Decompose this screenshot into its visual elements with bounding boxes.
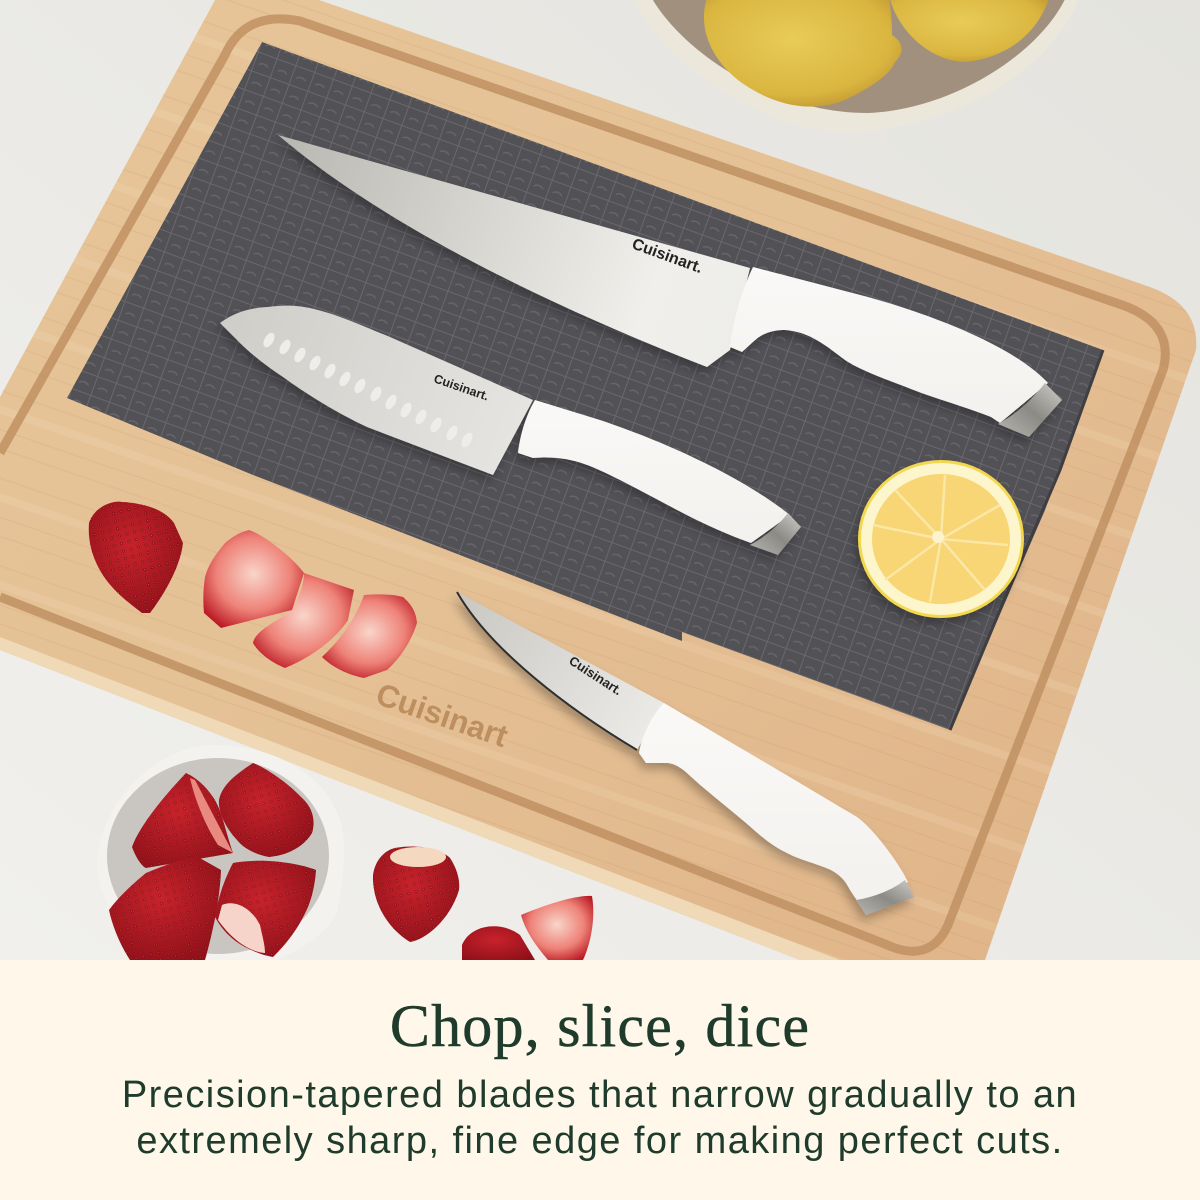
body text: extremely sharp, fine edge for making perfect cuts. <box>136 1120 1064 1162</box>
heading: Chop, slice, dice <box>390 993 810 1059</box>
whole halved berry <box>89 502 183 613</box>
towel <box>67 42 1103 730</box>
countertop <box>0 0 1200 960</box>
ramekin of strawberries <box>97 745 344 960</box>
photo: knives on cutting board <box>0 0 1196 960</box>
body text: Precision-tapered blades that narrow gradually to an <box>122 1074 1078 1116</box>
engraved logo: Cuisinart <box>372 676 513 754</box>
strawberry slices <box>89 502 417 678</box>
bowl of lemons <box>631 0 1080 132</box>
santoku knife <box>220 306 801 555</box>
loose strawberries <box>373 846 593 960</box>
brand: Cuisinart. <box>432 372 491 403</box>
dimples <box>261 331 475 449</box>
caption band <box>0 960 1200 1200</box>
brand: Cuisinart. <box>630 236 705 277</box>
lemon slice <box>858 460 1024 618</box>
brand: Cuisinart. <box>566 653 625 698</box>
chef knife <box>278 135 1062 437</box>
paring knife <box>457 592 914 915</box>
cutting board <box>0 0 1196 960</box>
body text <box>122 1074 1078 1162</box>
